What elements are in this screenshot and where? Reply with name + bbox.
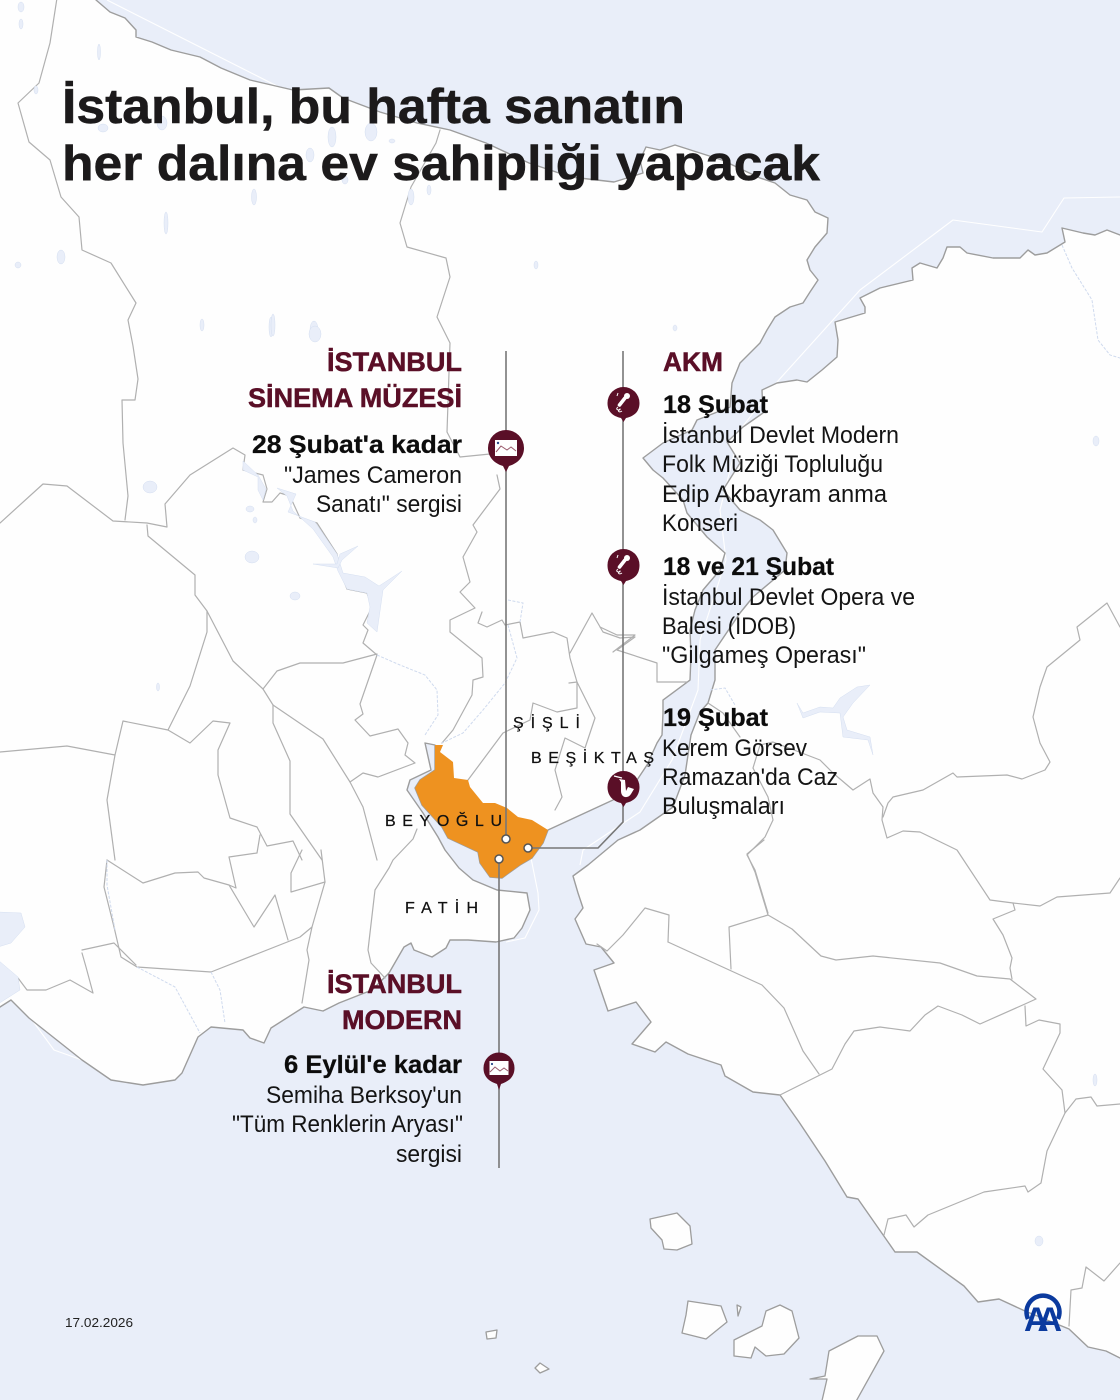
- text block: İstanbul Modern: [232, 969, 463, 1168]
- pin icon: microphone, 18 ve 21 Şubat: [608, 549, 640, 585]
- islands: [486, 1213, 884, 1400]
- text block: İstanbul Modern: 6 Eylül'e kadar: [284, 1051, 462, 1079]
- text block: AKM: Kerem Görsev: [662, 735, 807, 762]
- district: Beyoğlu highlighted: [415, 745, 548, 878]
- text block: İstanbul Modern: "Tüm Renklerin Aryası": [232, 1111, 463, 1138]
- title: her dalına ev sahipliği yapacak: [62, 137, 821, 191]
- text block: AKM: 18 ve 21 Şubat: [663, 553, 835, 581]
- title: İstanbul, bu hafta sanatın: [62, 80, 685, 134]
- text block: İstanbul Sinema Müzesi: Sanatı" sergisi: [316, 491, 462, 518]
- text block: İstanbul Sinema Müzesi: "James Cameron: [284, 462, 462, 489]
- text block: İstanbul Modern: MODERN: [342, 1005, 462, 1035]
- date: 17.02.2026: [65, 1316, 133, 1330]
- logo: AA: AA: [1024, 1301, 1062, 1339]
- title: [62, 80, 821, 191]
- connector line: AKM: [528, 351, 623, 848]
- streams: [107, 245, 1120, 1033]
- text block: İstanbul Modern: sergisi: [396, 1141, 462, 1168]
- text block: AKM: 18 Şubat: [663, 391, 769, 419]
- text block: AKM: Folk Müziği Topluluğu: [662, 451, 883, 478]
- text block: AKM: [662, 347, 915, 820]
- district labels: BEŞİKTAŞ: [531, 748, 654, 767]
- maritime boundaries: [32, 0, 1120, 1060]
- text block: İstanbul Sinema Müzesi: 28 Şubat'a kadar: [252, 431, 462, 459]
- text block: İstanbul Modern: İSTANBUL: [327, 969, 462, 999]
- pin icon: image, Sinema Müzesi: [488, 430, 524, 472]
- district labels: [385, 713, 654, 917]
- text block: AKM: Balesi (İDOB): [662, 613, 796, 640]
- logo: AA: [1024, 1296, 1062, 1339]
- text block: AKM: İstanbul Devlet Modern: [662, 422, 899, 449]
- pin icon: microphone, 18 Şubat: [608, 387, 640, 422]
- connector line: Istanbul Modern: [498, 859, 500, 1168]
- land: european side: [0, 0, 828, 1085]
- location dots: [495, 835, 532, 863]
- land: asian side: [573, 228, 1120, 1360]
- text block: İstanbul Sinema Müzesi: İSTANBUL: [327, 347, 462, 377]
- text block: İstanbul Modern: Semiha Berksoy'un: [266, 1082, 462, 1109]
- text block: AKM: İstanbul Devlet Opera ve: [662, 584, 915, 611]
- text block: AKM: 19 Şubat: [663, 704, 769, 732]
- text block: İstanbul Sinema Müzesi: [248, 347, 462, 518]
- text block: İstanbul Sinema Müzesi: SİNEMA MÜZESİ: [248, 383, 462, 413]
- text block: AKM: Buluşmaları: [662, 793, 785, 820]
- connector line: Istanbul Sinema Müzesi: [505, 351, 507, 839]
- district labels: FATİH: [405, 898, 478, 917]
- district labels: BEYOĞLU: [385, 811, 502, 830]
- text block: AKM: Ramazan'da Caz: [662, 764, 838, 791]
- text block: AKM: Konseri: [662, 510, 738, 537]
- pin icon: image, Istanbul Modern: [483, 1052, 514, 1090]
- text block: AKM: AKM: [663, 347, 723, 377]
- district labels: ŞİŞLİ: [513, 713, 580, 732]
- pin icon: saxophone, 19 Şubat: [608, 771, 640, 807]
- text block: AKM: "Gilgameş Operası": [662, 642, 866, 669]
- text block: AKM: Edip Akbayram anma: [662, 481, 888, 508]
